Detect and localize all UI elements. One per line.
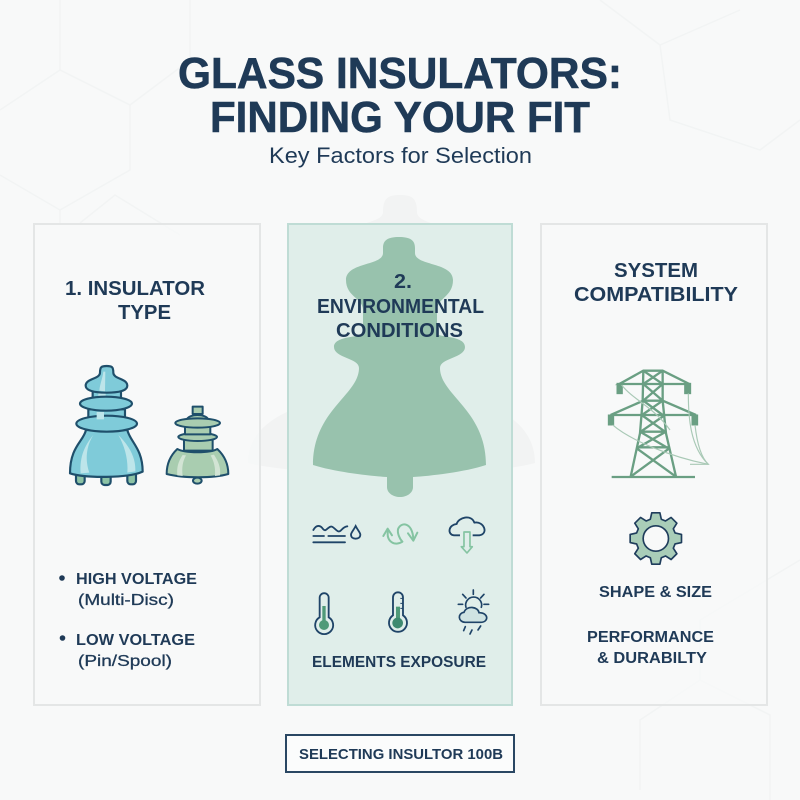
- footer callout: SELECTING INSULTOR 100B: [299, 746, 503, 763]
- heading: environmental conditions: CONDITIONS: [336, 320, 463, 342]
- heading: insulator type: TYPE: [118, 302, 171, 324]
- icon: cycle arrows: [383, 524, 417, 544]
- panel: environmental conditions: [288, 224, 512, 705]
- icon: water and moisture: [313, 526, 360, 542]
- list item: high voltage: (Multi-Disc): [78, 592, 174, 609]
- title: GLASS INSULATORS:: [178, 49, 622, 98]
- heading: system compatibility: COMPATIBILITY: [574, 284, 739, 306]
- label: performance and durability: PERFORMANCE: [587, 629, 714, 646]
- panel: system compatibility: [541, 224, 767, 705]
- icon: sun, cloud and rain: [458, 590, 489, 634]
- icon: cloud with down arrow: [449, 517, 485, 553]
- list: voltage types: [59, 571, 197, 670]
- icon: insulator silhouette: [313, 237, 486, 497]
- list item: high voltage: [59, 571, 197, 609]
- icon: transmission tower: [609, 371, 708, 477]
- icon: low voltage pin insulator: [167, 407, 228, 484]
- label: shape and size: SHAPE & SIZE: [599, 584, 712, 601]
- icon: gear: [630, 513, 681, 564]
- list item: low voltage: [60, 632, 195, 670]
- icon: thermometer high: [389, 592, 407, 632]
- heading: environmental conditions: [317, 271, 484, 342]
- heading: system compatibility: [574, 260, 739, 306]
- heading: system compatibility: SYSTEM: [614, 260, 698, 282]
- title: FINDING YOUR FIT: [210, 93, 590, 142]
- icon: high voltage multi-disc insulator: [70, 366, 143, 485]
- heading: insulator type: [65, 278, 206, 324]
- list item: low voltage: (Pin/Spool): [78, 653, 172, 670]
- heading: insulator type: 1. INSULATOR: [65, 278, 206, 300]
- label: elements exposure: ELEMENTS EXPOSURE: [312, 654, 486, 671]
- panel: insulator type: [34, 224, 260, 705]
- heading: environmental conditions: 2.: [394, 271, 412, 293]
- title: [178, 49, 622, 142]
- background watermark: faint insulator silhouette: [248, 195, 535, 474]
- icon: thermometer low: [315, 593, 333, 634]
- list item: high voltage: HIGH VOLTAGE: [76, 571, 197, 588]
- subtitle: Key Factors for Selection: [269, 143, 532, 168]
- list item: low voltage: LOW VOLTAGE: [76, 632, 195, 649]
- label: performance and durability: [587, 629, 714, 667]
- footer callout: [286, 735, 514, 772]
- label: performance and durability: & DURABILTY: [597, 650, 707, 667]
- heading: environmental conditions: ENVIRONMENTAL: [317, 296, 484, 318]
